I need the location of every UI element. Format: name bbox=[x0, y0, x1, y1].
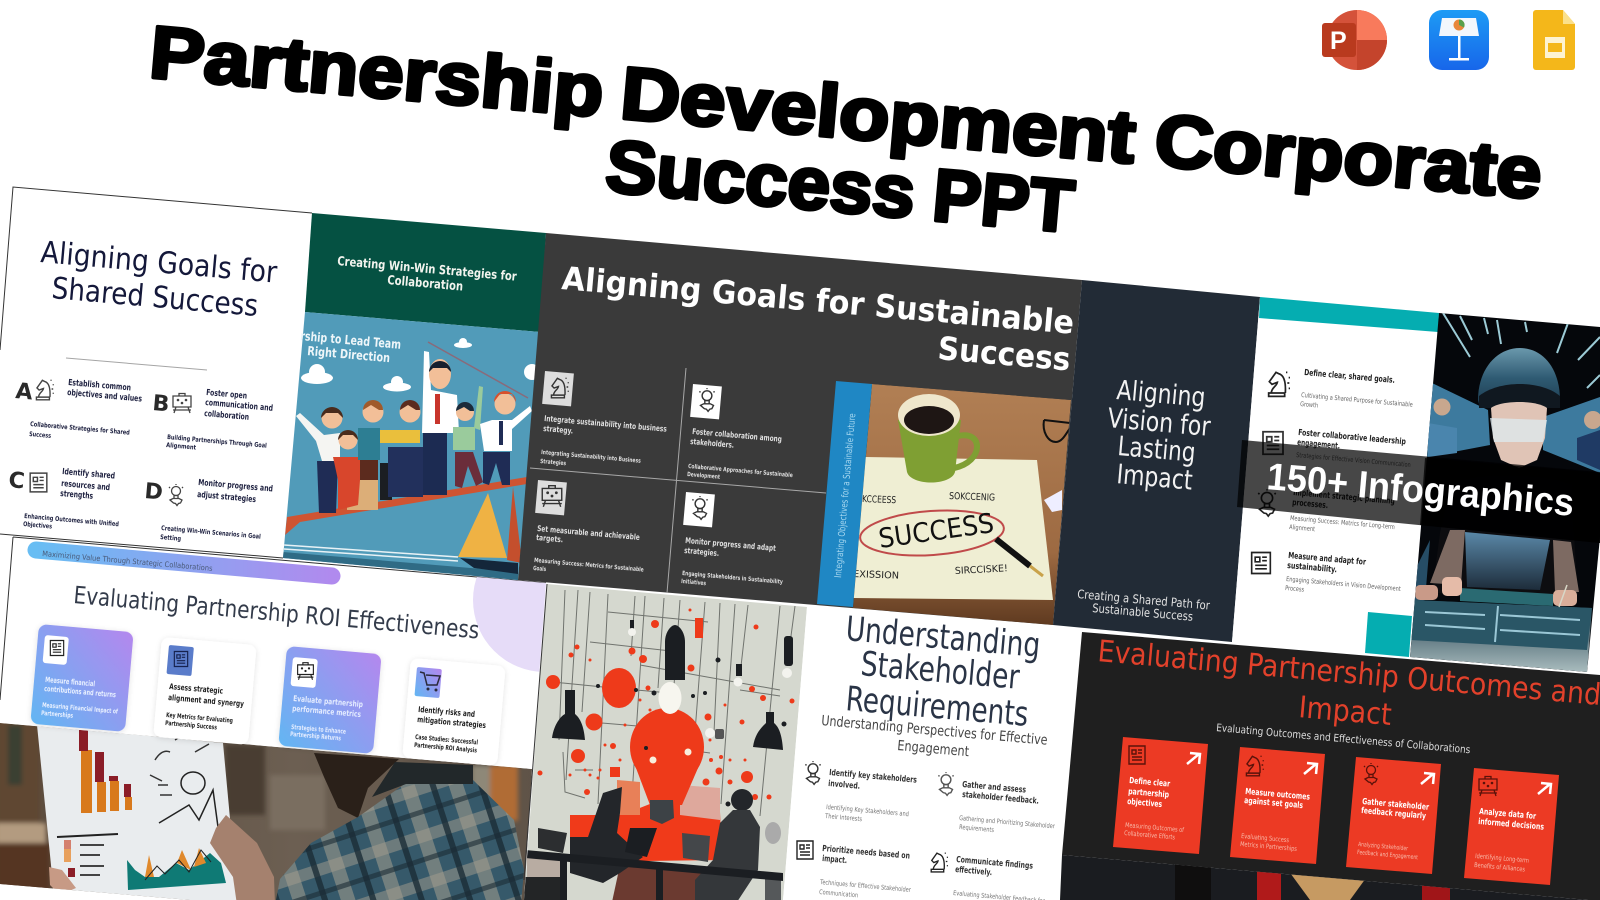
list text: Measure and adapt for bbox=[1288, 551, 1367, 568]
title: Success bbox=[603, 124, 919, 234]
card 1: Measure financial bbox=[45, 675, 95, 688]
card 4: Benefits of Alliances bbox=[1474, 861, 1526, 873]
objectives text: Establish common bbox=[68, 378, 131, 393]
heading: Collaboration bbox=[387, 272, 464, 294]
clouds bbox=[301, 338, 540, 392]
list text: Implement strategic planning bbox=[1293, 488, 1395, 507]
card 1 bbox=[30, 624, 134, 732]
objectives text: Collaborative Strategies for Shared bbox=[30, 420, 130, 437]
list icons bbox=[1252, 372, 1290, 574]
icon: PowerPoint bbox=[1322, 10, 1387, 70]
card 3: Gather stakeholder bbox=[1362, 797, 1430, 813]
card 2 bbox=[1230, 747, 1325, 864]
title bbox=[147, 10, 1545, 248]
slide caption bbox=[300, 328, 402, 365]
strategy text: Integrate sustainability into business bbox=[544, 414, 667, 434]
red bulb bbox=[538, 608, 794, 805]
strategy text: Set measurable and achievable bbox=[537, 524, 641, 542]
objectives text: Identify shared bbox=[62, 467, 115, 482]
strategy text: Goals bbox=[533, 565, 547, 573]
heading: Aligning Goals for Sustainable bbox=[560, 259, 1076, 342]
photo: coffee and notebook bbox=[853, 384, 1071, 625]
objectives text: Success bbox=[29, 430, 52, 440]
icon: PowerPoint: P bbox=[1330, 27, 1347, 55]
icon tiles bbox=[535, 371, 722, 527]
icon: Google Slides bbox=[1533, 10, 1575, 70]
card 4 bbox=[1464, 768, 1559, 885]
list text: processes. bbox=[1292, 498, 1328, 511]
sails and boat bbox=[458, 493, 507, 558]
heading: Impact bbox=[1115, 459, 1194, 497]
stakeholder items: Requirements bbox=[959, 823, 995, 834]
strategy text: Monitor progress and adapt bbox=[685, 536, 776, 553]
yellow man bbox=[380, 400, 423, 497]
strategy text: Engaging Stakeholders in Sustainability bbox=[682, 570, 783, 586]
objectives text: Objectives bbox=[23, 520, 53, 531]
blue side strip bbox=[817, 381, 872, 607]
card 1: Collaborative Efforts bbox=[1124, 829, 1176, 841]
stakeholder items: effectively. bbox=[955, 865, 992, 878]
card 2: Metrics in Partnerships bbox=[1240, 840, 1298, 853]
card 3 bbox=[278, 646, 382, 754]
heading: Aligning bbox=[1115, 375, 1207, 414]
card 4: mitigation strategies bbox=[417, 715, 487, 730]
card 2 bbox=[153, 637, 257, 745]
letters and icons: A bbox=[14, 379, 34, 405]
objectives text: communication and bbox=[205, 398, 273, 414]
list text bbox=[1285, 368, 1413, 594]
list text: Strategies for Effective Vision Communication bbox=[1296, 451, 1411, 469]
panel: stakeholder requirements slide bbox=[783, 607, 1082, 900]
heading: Aligning Goals for bbox=[39, 235, 279, 291]
card 3: Feedback and Engagement bbox=[1357, 849, 1419, 861]
strategy text: Integrating Sustainability into Business bbox=[541, 449, 641, 465]
strategy text: Foster collaboration among bbox=[692, 427, 782, 444]
title: Partnership bbox=[147, 10, 607, 133]
stakeholder items: Prioritize needs based on bbox=[822, 844, 910, 862]
strategy text: strategies. bbox=[684, 546, 719, 558]
lilac circle bbox=[473, 577, 546, 672]
card 4 bbox=[402, 658, 506, 766]
photo: coffee and notebook: KCCEESS bbox=[862, 494, 896, 506]
strategy text: Development bbox=[687, 471, 720, 481]
title: Corporate bbox=[1152, 98, 1545, 215]
card 3: Partnership Returns bbox=[290, 730, 341, 742]
stakeholder items: impact. bbox=[822, 854, 848, 866]
photo: coffee and notebook: SUCCESS bbox=[877, 508, 996, 555]
stakeholder items: Techniques for Effective Stakeholder bbox=[819, 878, 911, 894]
card 2: Measure outcomes bbox=[1245, 787, 1310, 803]
subtitle: Creating a Shared Path for bbox=[1077, 587, 1211, 613]
strategy text: Initiatives bbox=[681, 578, 707, 587]
card 3: feedback regularly bbox=[1361, 806, 1427, 822]
letters and icons: B bbox=[151, 391, 170, 417]
subheading: Engagement bbox=[897, 738, 970, 760]
strategy text: Strategies bbox=[540, 458, 567, 467]
subtitle pill: Maximizing Value Through Strategic Collaborations bbox=[42, 549, 213, 573]
objectives text bbox=[23, 378, 273, 543]
card 1: Define clear bbox=[1129, 776, 1171, 790]
banner: 150+ Infographics bbox=[1237, 440, 1600, 543]
heading: Stakeholder bbox=[859, 644, 1021, 698]
list text: engagement. bbox=[1297, 438, 1340, 452]
small man bbox=[453, 386, 483, 488]
people bbox=[296, 351, 532, 513]
panel: Aligning Goals for Sustainable Success slide bbox=[518, 233, 1082, 625]
photo: helmeted woman at control table bbox=[1405, 310, 1600, 675]
card 2: Partnership Success bbox=[165, 719, 217, 732]
photo: puzzle pieces strip bbox=[1060, 855, 1588, 900]
panel: bulb illustration slide bbox=[524, 584, 807, 900]
heading bbox=[844, 609, 1042, 735]
strategy text: Measuring Success: Metrics for Sustainable bbox=[534, 557, 644, 574]
card 3 bbox=[1346, 757, 1441, 874]
list text: Cultivating a Shared Purpose for Sustainable bbox=[1301, 391, 1413, 409]
stakeholder items: Identifying Key Stakeholders and bbox=[826, 803, 909, 818]
objectives text: Monitor progress and bbox=[198, 478, 273, 495]
side screens bbox=[1427, 383, 1490, 457]
icon: Keynote bbox=[1429, 10, 1489, 70]
strategy text bbox=[533, 414, 793, 587]
ramp bbox=[285, 477, 527, 535]
card 3: Analyzing Stakeholder bbox=[1358, 841, 1409, 852]
list text: Growth bbox=[1300, 400, 1318, 410]
card 3: performance metrics bbox=[292, 704, 362, 719]
photo: coffee and notebook: SIRCCISKE! bbox=[955, 563, 1008, 577]
subtitle pill bbox=[36, 549, 332, 576]
heading: Lasting bbox=[1116, 431, 1197, 469]
strategy text: strategy. bbox=[543, 424, 573, 436]
objectives text: Alignment bbox=[166, 441, 196, 452]
subheading: Evaluating Outcomes and Effectiveness of Collaborations bbox=[1216, 722, 1471, 756]
objectives text: resources and bbox=[61, 479, 110, 493]
slide caption: rship to Lead Team bbox=[300, 328, 402, 352]
heading bbox=[39, 235, 279, 324]
strategy text: stakeholders. bbox=[690, 437, 734, 450]
letters and icons: D bbox=[143, 479, 164, 506]
card 2: Evaluating Success bbox=[1241, 832, 1290, 844]
title: Development bbox=[618, 51, 1139, 179]
strategy text: Collaborative Approaches for Sustainable bbox=[688, 463, 793, 479]
card 4: Identify risks and bbox=[418, 705, 476, 719]
body bbox=[1432, 475, 1578, 595]
card 4: Analyze data for bbox=[1479, 807, 1537, 822]
card 1: Partnerships bbox=[41, 709, 73, 720]
list text: Process bbox=[1285, 584, 1305, 594]
subtitle bbox=[1077, 587, 1211, 624]
photo: man holding chart bbox=[0, 715, 535, 900]
stakeholder items: Gather and assess bbox=[962, 780, 1026, 796]
heading: Requirements bbox=[844, 679, 1030, 735]
face bbox=[1491, 402, 1547, 468]
stakeholder items: Communicate findings bbox=[956, 855, 1033, 872]
objectives text: Building Partnerships Through Goal bbox=[167, 433, 267, 450]
objectives text: collaboration bbox=[204, 409, 249, 423]
panel: shared goals list slide bbox=[1232, 297, 1439, 657]
heading: Understanding bbox=[844, 609, 1042, 666]
card 1: Measuring Outcomes of bbox=[1125, 821, 1185, 834]
teal man bbox=[358, 400, 392, 500]
table bbox=[1410, 600, 1592, 672]
objectives text: objectives and values bbox=[67, 388, 142, 405]
objectives text: Foster open bbox=[206, 388, 247, 402]
stakeholder items: Gathering and Prioritizing Stakeholder bbox=[959, 814, 1055, 830]
card 1: partnership bbox=[1128, 787, 1169, 801]
heading: Impact bbox=[1297, 690, 1393, 733]
heading: Creating Win-Win Strategies for bbox=[337, 253, 518, 284]
card 2: Key Metrics for Evaluating bbox=[166, 711, 234, 725]
letters and icons: C bbox=[7, 468, 26, 494]
stakeholder items: Their Interests bbox=[824, 812, 863, 823]
card 4: Identifying Long-term bbox=[1475, 852, 1529, 865]
bottom desks bbox=[538, 828, 567, 853]
objectives text: adjust strategies bbox=[197, 490, 256, 505]
card 3: Strategies to Enhance bbox=[291, 723, 347, 736]
card 4: informed decisions bbox=[1478, 817, 1544, 833]
stakeholder items bbox=[797, 761, 1055, 900]
list text: Alignment bbox=[1289, 523, 1316, 533]
right man bbox=[480, 391, 532, 485]
strategy text: targets. bbox=[536, 533, 564, 544]
card 4: Case Studies: Successful bbox=[415, 733, 478, 746]
slide caption: Right Direction bbox=[307, 343, 391, 365]
heading: Shared Success bbox=[50, 271, 260, 324]
photo: coffee and notebook: EXISSION bbox=[853, 569, 899, 582]
list text: Measuring Success: Metrics for Long-term bbox=[1290, 514, 1395, 531]
heading: Evaluating Partnership ROI Effectiveness bbox=[72, 581, 480, 644]
card 1 bbox=[1113, 737, 1208, 854]
list text: Engaging Stakeholders in Vision Development bbox=[1286, 575, 1401, 593]
card 1: contributions and returns bbox=[44, 684, 117, 699]
objectives text: strengths bbox=[60, 489, 93, 502]
stakeholder items: Identify key stakeholders bbox=[829, 768, 917, 786]
objectives text: Setting bbox=[160, 533, 182, 543]
heading: Vision for bbox=[1106, 403, 1212, 443]
banner: 150+ Infographics: 150+ Infographics bbox=[1265, 456, 1576, 525]
tall man bbox=[422, 351, 459, 495]
pendant lamps bbox=[552, 620, 793, 806]
blue side strip: Integrating Objectives for a Sustainable Future bbox=[833, 413, 858, 578]
heading: Success bbox=[936, 329, 1072, 379]
card 2: against set goals bbox=[1244, 796, 1303, 811]
photo: coffee and notebook: SOKCCENIG bbox=[949, 491, 995, 504]
silhouettes and table bbox=[570, 787, 643, 883]
subheading: Understanding Perspectives for Effective bbox=[821, 713, 1048, 749]
helmet bbox=[1478, 348, 1560, 408]
list text: Define clear, shared goals. bbox=[1304, 368, 1395, 386]
list text: Foster collaborative leadership bbox=[1298, 428, 1406, 447]
paper chart bbox=[37, 725, 238, 900]
girl with box bbox=[333, 430, 378, 510]
heading bbox=[1106, 375, 1212, 497]
letters and icons bbox=[7, 379, 191, 506]
card 2: alignment and synergy bbox=[168, 693, 245, 709]
woman bbox=[296, 407, 343, 513]
objectives text: Creating Win-Win Scenarios in Goal bbox=[161, 524, 261, 541]
card 1: objectives bbox=[1127, 797, 1162, 810]
illustration bbox=[283, 338, 540, 582]
subtitle: Sustainable Success bbox=[1092, 601, 1194, 624]
card 3: Evaluate partnership bbox=[293, 694, 364, 709]
panel: Aligning Goals for Shared Success slide bbox=[0, 187, 312, 558]
card 4: Partnership ROI Analysis bbox=[414, 741, 477, 754]
man with plaid shirt bbox=[49, 753, 524, 900]
card 2: Assess strategic bbox=[169, 682, 224, 696]
list text: sustainability. bbox=[1287, 561, 1337, 575]
stakeholder items: involved. bbox=[828, 779, 860, 792]
card 1: Measuring Financial Impact of bbox=[42, 701, 118, 716]
stakeholder items: stakeholder feedback. bbox=[962, 790, 1039, 807]
heading bbox=[560, 259, 1076, 379]
panel: outcomes slide bbox=[1062, 632, 1600, 900]
panel: ROI slide bbox=[0, 536, 546, 769]
title: PPT bbox=[930, 153, 1077, 248]
panel: win-win strategies slide bbox=[283, 213, 546, 582]
panel: Aligning Vision slide bbox=[1053, 280, 1260, 642]
objectives text: Enhancing Outcomes with Unified bbox=[24, 512, 119, 528]
